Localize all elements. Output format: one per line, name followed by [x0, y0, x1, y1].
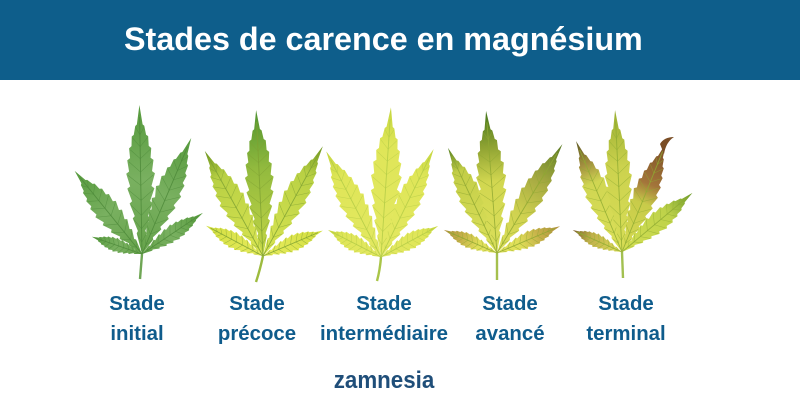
leaf: stade terminal	[564, 110, 699, 278]
logo: zamnesia: zamnesia	[334, 367, 434, 394]
label: stade avancé: Stade	[482, 293, 538, 315]
label: stade initial: Stade	[109, 293, 165, 315]
label: stade précoce: Stade	[229, 293, 285, 315]
label: stade intermédiaire: Stade	[356, 293, 412, 315]
header banner	[0, 0, 800, 80]
label: stade terminal: terminal	[586, 323, 666, 345]
label: stade avancé	[475, 293, 545, 345]
label: stade initial: initial	[110, 323, 164, 345]
title: Stades de carence en magnésium	[124, 21, 643, 57]
label: stade terminal: Stade	[598, 293, 654, 315]
label: stade initial	[109, 293, 165, 345]
label: stade intermédiaire	[320, 293, 448, 345]
leaf: stade précoce	[193, 109, 334, 282]
label: stade terminal	[586, 293, 666, 345]
label: stade précoce: précoce	[218, 323, 296, 345]
label: stade avancé: avancé	[475, 323, 545, 345]
label: stade intermédiaire: intermédiaire	[320, 323, 448, 345]
leaf: stade avancé	[437, 110, 573, 280]
label: stade précoce	[218, 293, 296, 345]
leaf: stade initial	[64, 105, 208, 279]
leaf: stade intermédiaire	[314, 106, 445, 281]
